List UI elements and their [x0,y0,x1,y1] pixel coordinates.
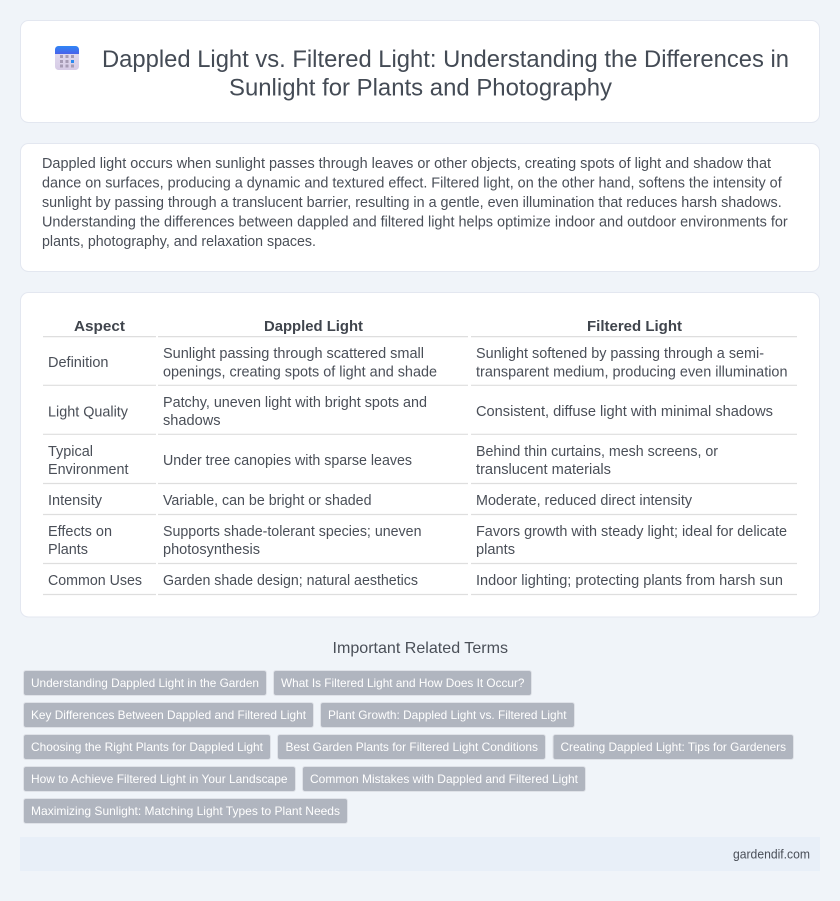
text block: introduction: dance on surfaces, producing a dynamic and textured effect. Filtered light, on the other hand, softens the intensity of [42,176,783,192]
table row: effects on plants [48,524,787,558]
table row: light quality: Consistent, diffuse light with minimal shadows [476,404,773,420]
table row: definition [48,346,788,380]
footer [20,837,820,871]
table row: definition: Sunlight passing through scattered small [163,346,424,362]
table row: light quality: shadows [163,413,220,429]
table row: typical environment: Environment [48,462,128,478]
table row: light quality [48,395,773,429]
table row: intensity: Intensity [48,493,103,509]
table row: common uses [48,573,783,589]
table row: effects on plants: Favors growth with steady light; ideal for delicate [476,524,787,540]
tag: Best Garden Plants for Filtered Light Conditions [286,740,538,754]
table row: typical environment: translucent materials [476,462,611,478]
tag [24,734,270,760]
tag: How to Achieve Filtered Light in Your Landscape [31,772,288,786]
table row: effects on plants: Effects on [48,524,112,540]
table row: effects on plants: Plants [48,542,88,558]
tag [24,702,314,728]
table row: typical environment [48,444,718,478]
table header row: Dappled Light [264,318,363,335]
tag [553,734,794,760]
title: Sunlight for Plants and Photography [229,74,612,102]
table header row: Aspect [74,318,125,335]
table row: typical environment: Typical [48,444,93,460]
table header row: Filtered Light [587,318,682,335]
icon: calendar [55,46,79,70]
table row: definition: Sunlight softened by passing through a semi- [476,346,764,362]
tag [24,670,266,696]
text block: introduction [42,156,788,250]
footer: gardendif.com [733,848,810,862]
table row: typical environment: Under tree canopies with sparse leaves [163,453,412,469]
text block: introduction: sunlight by passing through a translucent barrier, resulting in a gentle, even illumination that reduces harsh shadows. [42,195,782,211]
tag: Creating Dappled Light: Tips for Gardeners [560,740,786,754]
tag [320,702,574,728]
heading: important related terms: Important Related Terms [332,640,508,657]
table row: common uses: Garden shade design; natural aesthetics [163,573,418,589]
table row: intensity [48,493,693,509]
tag: Key Differences Between Dappled and Filtered Light [31,708,307,722]
panel: introduction [20,144,820,272]
text block: introduction: Dappled light occurs when sunlight passes through leaves or other objects, creating spots of light and shadow that [42,156,771,172]
tag: Maximizing Sunlight: Matching Light Types to Plant Needs [31,804,340,818]
table row: effects on plants: plants [476,542,515,558]
table row: intensity: Moderate, reduced direct intensity [476,493,693,509]
table row: definition: openings, creating spots of light and shade [163,364,437,380]
title [102,46,789,102]
tag [274,670,532,696]
tag [302,766,586,792]
tag: What Is Filtered Light and How Does It Occur? [281,676,525,690]
table header row [74,318,682,335]
table row: common uses: Indoor lighting; protecting plants from harsh sun [476,573,783,589]
panel: header [20,20,820,122]
tag cloud: related terms [24,670,794,824]
table row: light quality: Patchy, uneven light with bright spots and [163,395,427,411]
table row: light quality: Light Quality [48,404,129,420]
tag: Understanding Dappled Light in the Garden [31,676,259,690]
tag: Choosing the Right Plants for Dappled Light [31,740,264,754]
tag [24,798,348,824]
tag: Plant Growth: Dappled Light vs. Filtered Light [328,708,567,722]
table row: effects on plants: photosynthesis [163,542,260,558]
table row: common uses: Common Uses [48,573,142,589]
text block: introduction: Understanding the differences between dappled and filtered light helps optimize indoor and outdoor environments for [42,214,788,230]
table row: definition: transparent medium, producing even illumination [476,364,788,380]
title: Dappled Light vs. Filtered Light: Understanding the Differences in [102,46,789,73]
tag: Common Mistakes with Dappled and Filtered Light [310,772,579,786]
table row: typical environment: Behind thin curtains, mesh screens, or [476,444,718,460]
panel: comparison table [20,292,820,617]
table row: effects on plants: Supports shade-tolerant species; uneven [163,524,422,540]
tag [278,734,546,760]
tag [24,766,296,792]
table row: definition: Definition [48,355,108,371]
table row: intensity: Variable, can be bright or shaded [163,493,372,509]
text block: introduction: plants, photography, and relaxation spaces. [42,234,316,250]
